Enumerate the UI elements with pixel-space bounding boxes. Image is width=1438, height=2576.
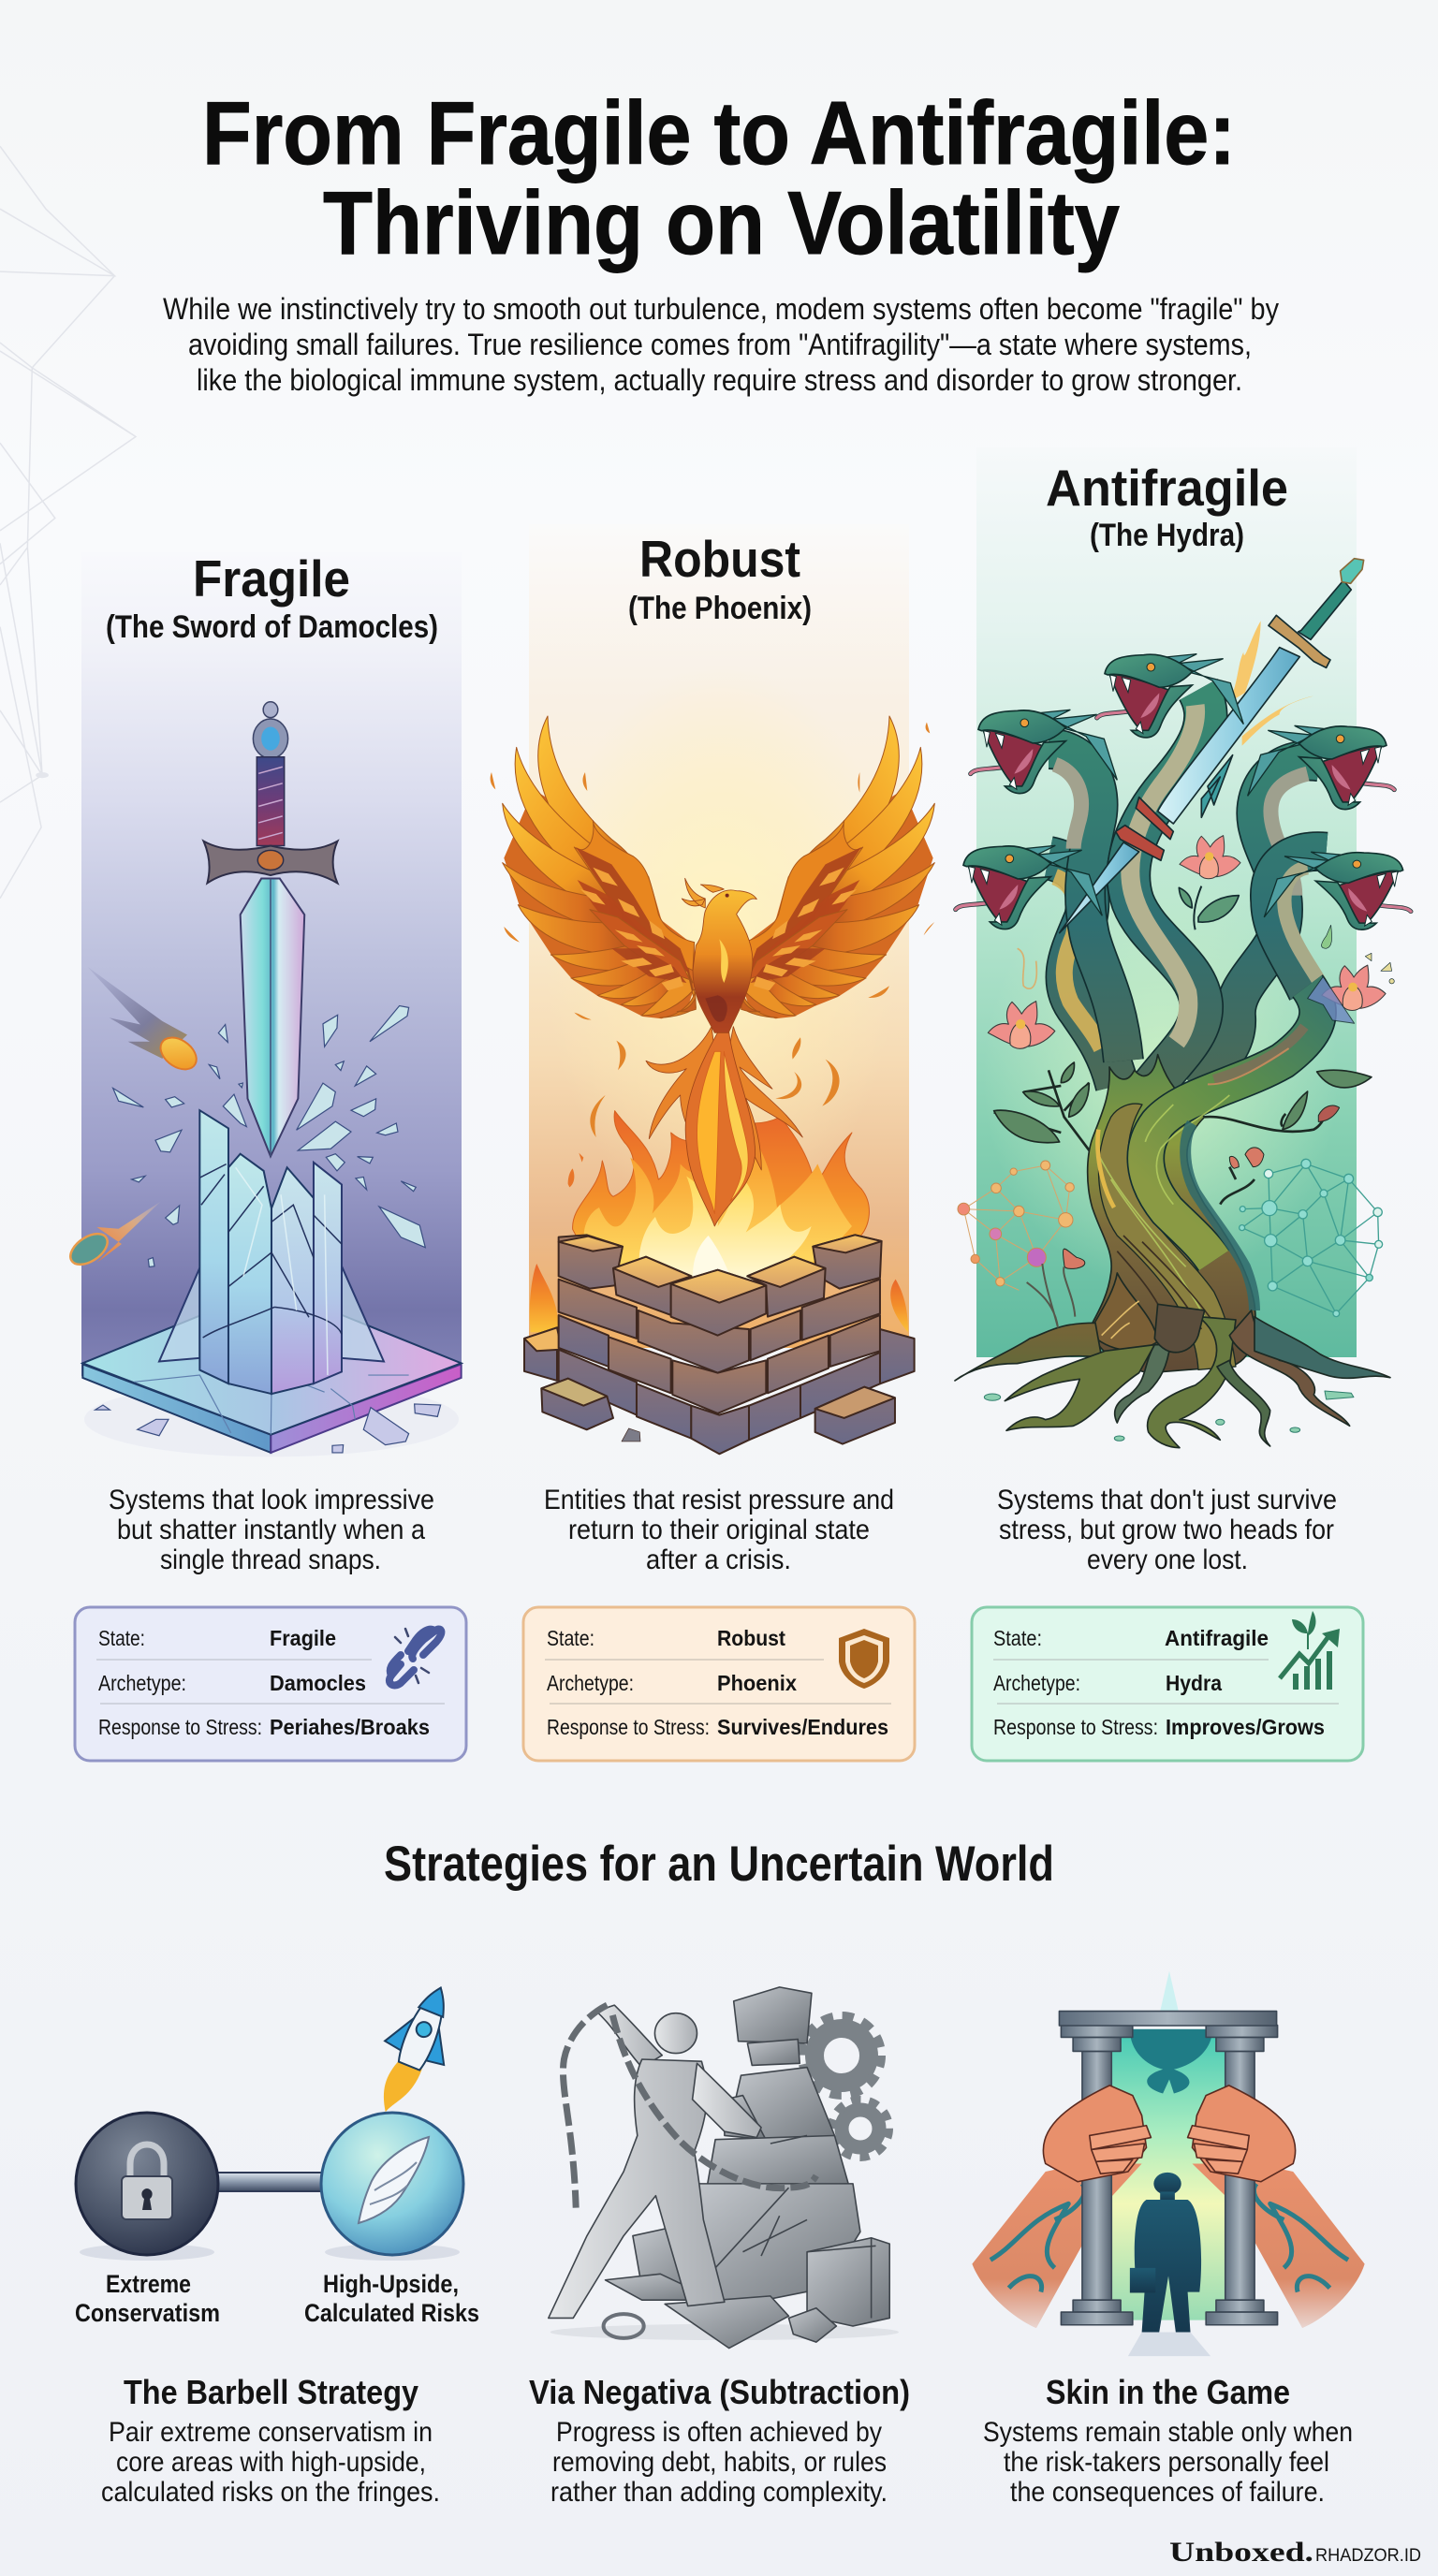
hydra necks — [1049, 690, 1327, 1092]
illustration: via negativa figure — [549, 1987, 899, 2349]
card: fragile: Damocles — [270, 1671, 366, 1695]
card: robust — [523, 1607, 915, 1761]
watermark: Unboxed. — [1169, 2537, 1313, 2568]
phoenix body and tail — [491, 723, 934, 1226]
description: antifragile: stress, but grow two heads for — [999, 1515, 1334, 1545]
description: robust: Entities that resist pressure and — [544, 1485, 894, 1515]
watermark — [1169, 2537, 1421, 2568]
stone tower — [606, 1987, 889, 2349]
card: antifragile: Antifragile — [1165, 1626, 1269, 1650]
description: fragile: Systems that look impressive — [109, 1485, 434, 1515]
intro paragraph: like the biological immune system, actually require stress and disorder to grow stronger. — [197, 363, 1242, 397]
icon: shield — [839, 1629, 889, 1689]
barbell bar — [215, 2173, 323, 2191]
card: fragile: Response to Stress: — [98, 1715, 262, 1739]
intro paragraph — [163, 292, 1279, 397]
phoenix wings — [503, 716, 696, 1018]
heading: antifragile: (The Hydra) — [1090, 518, 1244, 553]
illustration: skin in the game gate — [972, 1971, 1365, 2356]
section heading: Strategies for an Uncertain World — [384, 1837, 1054, 1892]
heading: robust — [628, 530, 812, 626]
crystal pillars, platform, shards — [66, 967, 462, 1456]
heading: robust: Robust — [639, 530, 800, 588]
card: robust: Response to Stress: — [547, 1715, 710, 1739]
flames — [530, 1111, 908, 1332]
strategy: barbell text: core areas with high-upside, — [116, 2447, 426, 2478]
silhouette with briefcase — [1130, 2173, 1201, 2332]
card: robust: Survives/Endures — [717, 1715, 888, 1739]
illustration: sword of damocles — [66, 702, 462, 1456]
heading: antifragile — [1046, 459, 1288, 553]
chains — [563, 2005, 816, 2208]
fists — [1043, 2086, 1296, 2182]
left weight with lock — [76, 2113, 218, 2255]
sword through the hydra — [1018, 559, 1394, 1023]
heading: fragile: (The Sword of Damocles) — [106, 609, 438, 645]
description: antifragile — [997, 1485, 1337, 1575]
barbell labels — [75, 2270, 479, 2327]
card: antifragile — [972, 1607, 1363, 1761]
gears — [803, 2017, 888, 2157]
background network lines — [0, 146, 136, 899]
intro paragraph: While we instinctively try to smooth out turbulence, modem systems often become "fragile" by — [163, 292, 1279, 326]
hourglass shape — [1130, 2029, 1212, 2093]
meteors — [87, 967, 187, 1059]
glow behind tree — [983, 861, 1339, 1292]
description: antifragile: every one lost. — [1087, 1544, 1248, 1575]
illustration: barbell — [75, 1976, 479, 2327]
strategy: skin in the game text: Skin in the Game — [1046, 2373, 1290, 2411]
strategy: via negativa text: rather than adding complexity. — [550, 2477, 888, 2508]
glow behind phoenix — [543, 665, 899, 1226]
upper sword — [203, 702, 337, 1156]
card: antifragile: Response to Stress: — [993, 1715, 1158, 1739]
card: antifragile: State: — [993, 1626, 1042, 1650]
title — [202, 83, 1236, 273]
pillars — [1059, 2012, 1278, 2325]
panel: antifragile column background — [976, 447, 1357, 1357]
description: fragile: but shatter instantly when a — [117, 1515, 425, 1545]
right weight with wing — [321, 2113, 463, 2255]
heading: antifragile: Antifragile — [1046, 459, 1288, 517]
illustration: hydra tree — [955, 559, 1411, 1448]
card: antifragile: Hydra — [1166, 1671, 1222, 1695]
glowing doorway — [1105, 2029, 1227, 2320]
panel: fragile column background — [81, 552, 462, 1376]
brick wall — [524, 1235, 915, 1454]
watermark: RHADZOR.ID — [1315, 2546, 1421, 2566]
heading: robust: (The Phoenix) — [628, 591, 812, 626]
arms — [972, 2163, 1142, 2328]
card: fragile: State: — [98, 1626, 145, 1650]
illustration: phoenix and burning brick wall — [491, 665, 934, 1454]
description: antifragile: Systems that don't just survive — [997, 1485, 1337, 1515]
strategy: skin in the game text: the consequences of failure. — [1010, 2477, 1325, 2508]
icon: growth chart with sprout — [1280, 1611, 1340, 1690]
strategy: via negativa text: removing debt, habits, or rules — [552, 2447, 887, 2478]
title: Thriving on Volatility — [323, 173, 1120, 273]
description: robust: after a crisis. — [646, 1544, 791, 1575]
card: robust: Phoenix — [717, 1671, 797, 1695]
heading: fragile — [106, 549, 438, 645]
barbell labels: Conservatism — [75, 2299, 220, 2327]
strategy: via negativa text: Progress is often achieved by — [556, 2417, 882, 2448]
hydra heads — [956, 654, 1411, 929]
barbell labels: Calculated Risks — [304, 2299, 479, 2327]
description: fragile: single thread snaps. — [160, 1544, 381, 1575]
description: robust: return to their original state — [568, 1515, 870, 1545]
card: fragile: Fragile — [270, 1626, 336, 1650]
strategy: barbell text: calculated risks on the fringes. — [101, 2477, 440, 2508]
panel: robust column background — [529, 524, 909, 1348]
card: fragile: Periahes/Broaks — [270, 1715, 430, 1739]
strategy: via negativa text — [529, 2373, 910, 2508]
card: fragile: Archetype: — [98, 1671, 186, 1695]
strategy: skin in the game text: Systems remain stable only when — [983, 2417, 1353, 2448]
card: antifragile: Archetype: — [993, 1671, 1080, 1695]
trunk, roots, branches, blossoms — [955, 986, 1390, 1448]
card: robust: Robust — [717, 1626, 785, 1650]
card: fragile — [75, 1607, 466, 1761]
heading: fragile: Fragile — [193, 549, 350, 607]
strategy: barbell text: The Barbell Strategy — [124, 2373, 418, 2411]
card: robust: Archetype: — [547, 1671, 634, 1695]
description: robust — [544, 1485, 894, 1575]
icon: broken chain link — [389, 1629, 441, 1685]
title: From Fragile to Antifragile: — [202, 83, 1236, 183]
card: antifragile: Improves/Grows — [1166, 1715, 1325, 1739]
strategy: barbell text: Pair extreme conservatism in — [109, 2417, 433, 2448]
strategy: skin in the game text: the risk-takers personally feel — [1004, 2447, 1329, 2478]
strategy: barbell text — [101, 2373, 440, 2508]
card: robust: State: — [547, 1626, 594, 1650]
description: fragile — [109, 1485, 434, 1575]
figure — [549, 2005, 761, 2318]
strategy: via negativa text: Via Negativa (Subtraction) — [529, 2373, 910, 2411]
strategy: skin in the game text — [983, 2373, 1353, 2508]
barbell labels: Extreme — [106, 2270, 191, 2298]
networks — [958, 1159, 1383, 1317]
rocket — [360, 1976, 470, 2126]
barbell labels: High-Upside, — [323, 2270, 459, 2298]
intro paragraph: avoiding small failures. True resilience comes from "Antifragility"—a state where systems, — [188, 328, 1252, 361]
